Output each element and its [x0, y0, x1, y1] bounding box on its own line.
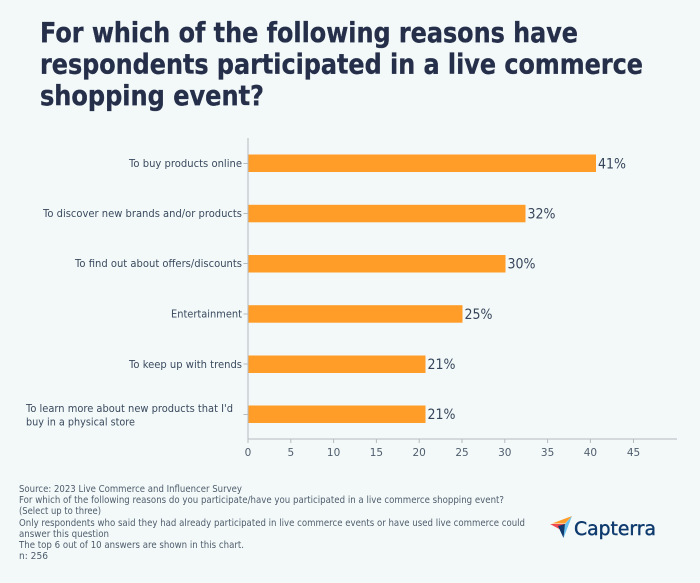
value labels: 25%: [464, 307, 492, 323]
bar chart: [25, 138, 677, 459]
value labels: 21%: [428, 357, 456, 373]
category labels: Entertainment: [171, 308, 243, 320]
source notes: Source: 2023 Live Commerce and Influencer Survey: [19, 484, 242, 495]
source notes: Only respondents who said they had already participated in live commerce events or have used live commerce could: [19, 518, 525, 529]
value labels: 21%: [428, 407, 456, 423]
category labels: buy in a physical store: [26, 416, 135, 428]
x axis tick labels: 10: [327, 447, 340, 459]
source notes: For which of the following reasons do you participate/have you participated in a live commerce shopping event?: [19, 495, 504, 506]
axes: [244, 138, 677, 443]
source notes: (Select up to three): [19, 506, 101, 517]
title: shopping event?: [40, 79, 264, 112]
title: [40, 16, 643, 112]
source notes: The top 6 out of 10 answers are shown in this chart.: [18, 540, 244, 551]
value labels: 41%: [598, 156, 626, 172]
x axis tick labels: 25: [455, 447, 469, 459]
category labels: To buy products online: [128, 157, 242, 170]
logo wordmark: Capterra: [574, 518, 656, 540]
source notes: [18, 484, 525, 562]
icon: Capterra arrow: [550, 516, 572, 538]
category labels: [25, 157, 243, 428]
x axis tick labels: [245, 447, 640, 459]
title: For which of the following reasons have: [40, 16, 578, 49]
x axis tick labels: 35: [541, 447, 554, 459]
x axis tick labels: 40: [584, 447, 597, 459]
logo: Capterra: [550, 516, 656, 540]
x axis tick labels: 0: [245, 447, 251, 459]
value labels: 30%: [508, 256, 536, 272]
x axis tick labels: 20: [413, 447, 426, 459]
value labels: 32%: [528, 206, 556, 222]
source notes: n: 256: [19, 551, 48, 562]
x axis tick labels: 45: [627, 447, 640, 459]
category labels: To learn more about new products that I'd: [25, 402, 233, 415]
value labels: [428, 156, 626, 423]
category labels: To keep up with trends: [128, 358, 242, 371]
x axis tick labels: 30: [498, 447, 511, 459]
source notes: answer this question: [19, 529, 109, 540]
category labels: To find out about offers/discounts: [74, 257, 242, 270]
x axis tick labels: 5: [287, 447, 294, 459]
bars: [248, 154, 596, 423]
x axis tick labels: 15: [370, 447, 383, 459]
category labels: To discover new brands and/or products: [42, 207, 242, 220]
